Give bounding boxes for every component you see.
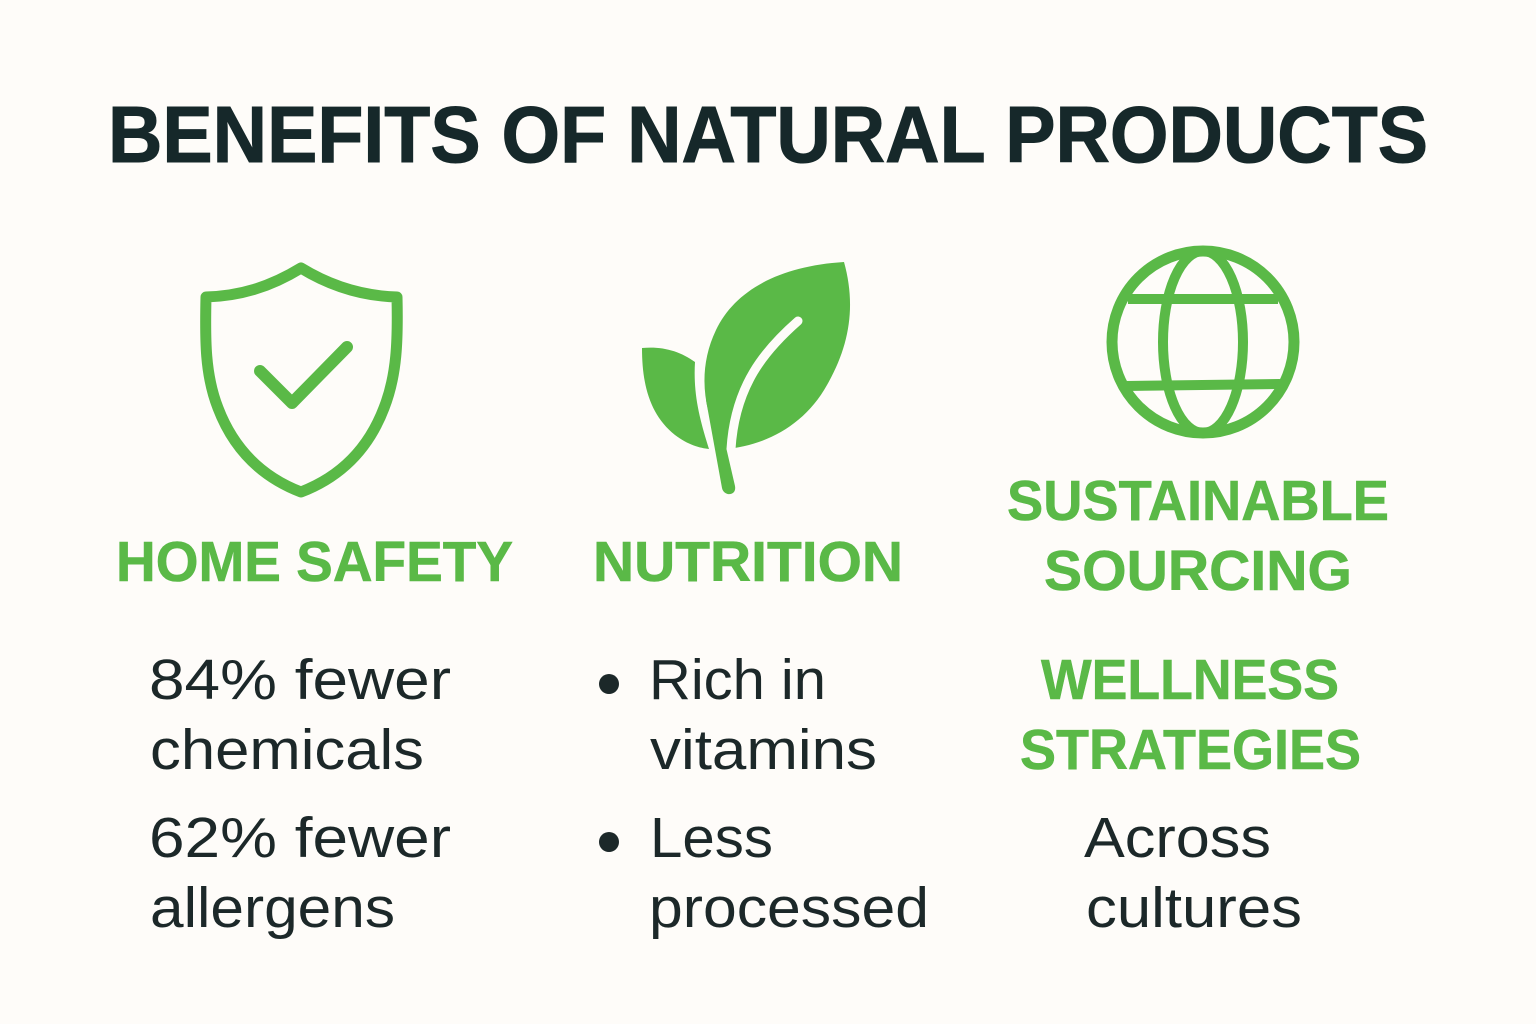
text: chemical and allergen stats	[149, 648, 451, 940]
column: nutrition	[593, 262, 929, 940]
column: sustainable sourcing	[1007, 251, 1389, 940]
text: chemical and allergen stats: 62% fewer	[149, 806, 451, 870]
text: chemical and allergen stats: chemicals	[150, 718, 424, 782]
list: nutrition bullets	[599, 648, 929, 940]
heading: wellness strategies	[1020, 648, 1361, 782]
list: nutrition bullets: Less	[650, 806, 773, 870]
icon: shield with check	[206, 268, 397, 492]
heading: sustainable sourcing: SUSTAINABLE	[1007, 469, 1389, 533]
heading: wellness strategies: STRATEGIES	[1020, 718, 1361, 782]
text: chemical and allergen stats: allergens	[150, 876, 395, 940]
heading: nutrition: NUTRITION	[593, 530, 903, 594]
icon: globe	[1112, 251, 1294, 433]
heading: home safety: HOME SAFETY	[116, 530, 513, 594]
heading: sustainable sourcing	[1007, 469, 1389, 603]
heading: sustainable sourcing: SOURCING	[1044, 539, 1352, 603]
list: nutrition bullets: Rich in	[649, 648, 826, 712]
heading: wellness strategies: WELLNESS	[1041, 648, 1339, 712]
text: across cultures	[1084, 806, 1302, 940]
column: home safety	[116, 268, 513, 940]
list: nutrition bullets: vitamins	[650, 718, 877, 782]
list: nutrition bullets: processed	[649, 876, 929, 940]
title: BENEFITS OF NATURAL PRODUCTS	[108, 90, 1428, 179]
text: across cultures: cultures	[1086, 876, 1302, 940]
icon: leaf sprout	[642, 262, 850, 494]
text: across cultures: Across	[1084, 806, 1271, 870]
text: chemical and allergen stats: 84% fewer	[149, 648, 451, 712]
